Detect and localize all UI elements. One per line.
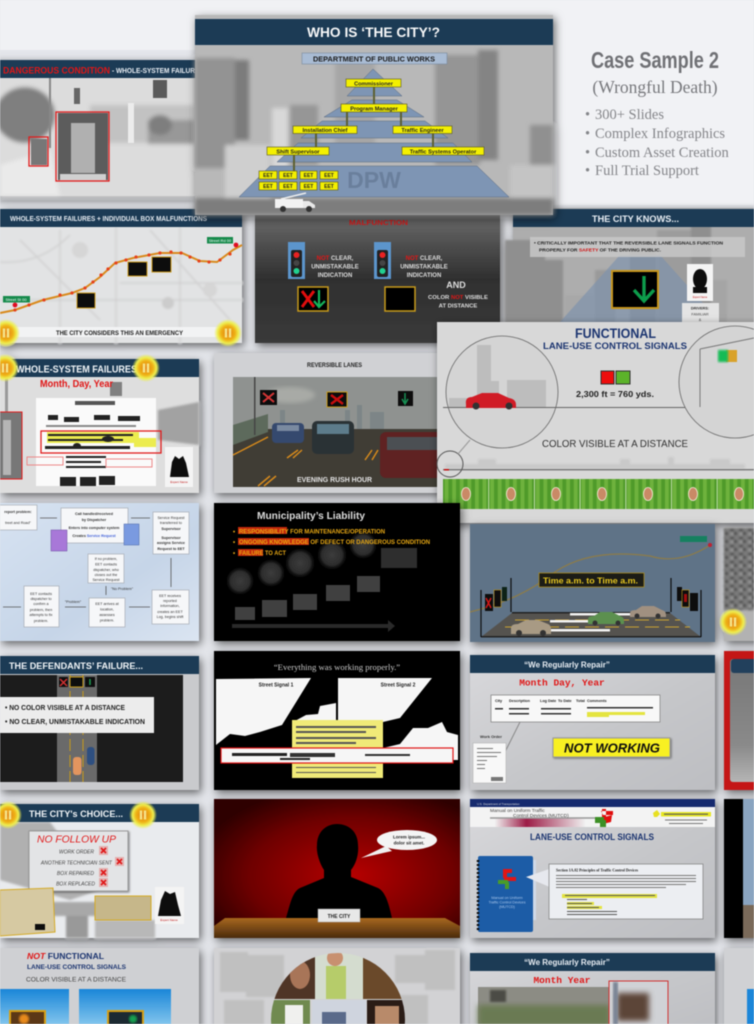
header bar: - WHOLE-SYSTEM FAILUR [112, 68, 195, 75]
yellow document [292, 720, 383, 778]
title: NOT FUNCTIONAL [27, 951, 105, 961]
dim arrow [232, 620, 395, 632]
desk [214, 918, 460, 938]
slide: the city silhouette [214, 799, 460, 938]
arrows [3, 518, 171, 607]
header [0, 359, 199, 377]
emergency caption: THE CITY CONSIDERS THIS AN EMERGENCY [56, 330, 184, 337]
road scene [233, 377, 443, 487]
left magnifier: car [443, 336, 754, 448]
quote: “Everything was working properly.” [274, 662, 400, 672]
flow text: EET receives [159, 594, 181, 598]
green arrow signal [612, 271, 658, 308]
flow text: confirm a [33, 602, 50, 606]
slide: dangerous condition [0, 60, 195, 196]
flow text: location, [100, 608, 114, 612]
bullets: • [233, 530, 235, 536]
not working label: NOT WORKING [564, 740, 660, 756]
EET grid: EET [263, 184, 273, 190]
bullets box [0, 697, 154, 733]
title: LANE-USE CONTROL SIGNALS [530, 832, 654, 843]
traffic signal right [374, 242, 391, 279]
signals left [485, 587, 507, 611]
role labels: Shift Supervisor [276, 150, 320, 156]
EET grid: EET [263, 173, 273, 179]
panel: functional lane-use control signals [437, 322, 754, 523]
no follow up box: BOX REPAIRED [57, 871, 94, 877]
signals right [677, 587, 698, 611]
sky photo right [79, 989, 171, 1024]
signal x and arrow [298, 287, 328, 311]
title: LANE-USE CONTROL SIGNALS [543, 341, 687, 352]
route line [470, 545, 710, 612]
slide: we regularly repair work order [470, 655, 715, 790]
work log table: Log Date [540, 699, 556, 703]
slide: MUTCD lane-use control signals [470, 799, 715, 938]
slide: aerial map [719, 527, 754, 641]
role boxes [267, 79, 484, 155]
title: Municipality’s Liability [257, 511, 365, 522]
work log table: Total [576, 699, 585, 703]
dark suv [312, 421, 354, 454]
flow text: dispatcher, who [93, 568, 119, 572]
small zoom circle [437, 440, 470, 477]
EET grid: EET [324, 184, 334, 190]
slide: not functional [0, 948, 199, 1024]
warning lights [0, 319, 20, 347]
caption: COLOR VISIBLE AT A DISTANCE [542, 439, 688, 450]
street signs [3, 237, 233, 302]
work log table: City [495, 699, 503, 703]
red zoom box [609, 981, 668, 1024]
feature list: Full Trial Support [595, 163, 699, 179]
header bar: WHOLE-SYSTEM FAILURES + INDIVIDUAL BOX MALFUNCTIONS [10, 216, 207, 223]
flow boxes [0, 505, 189, 627]
red and green signal squares [601, 371, 630, 384]
speech bubble [361, 830, 437, 858]
sketch background [0, 377, 199, 493]
leader line [501, 722, 520, 760]
street signs: Street St 00 [5, 297, 27, 302]
name plate: THE CITY [328, 914, 351, 920]
DPW watermark: DPW [347, 167, 401, 193]
blue car [272, 423, 304, 443]
text not clear right [400, 256, 448, 279]
warning lights [0, 354, 19, 382]
text not clear right: NOT CLEAR, [406, 256, 443, 262]
feature list [585, 107, 729, 179]
bullets: RESPONSIBILITY FOR MAINTENANCE/OPERATION [239, 530, 385, 536]
street signal labels: Street Signal 2 [381, 682, 416, 688]
slide: sky photo edge [724, 799, 754, 938]
expert card: Expert Name [160, 918, 178, 922]
slide: defendants' failure [0, 656, 199, 790]
lane arrows [550, 613, 630, 632]
expert card: Expert Name [170, 480, 188, 484]
role labels [276, 82, 477, 156]
street map background [0, 227, 242, 343]
drivers box: FAMILIAR [691, 312, 709, 316]
slide: reversible lanes [214, 353, 454, 493]
highlighted line [221, 748, 453, 763]
overhead signals [59, 677, 95, 687]
text not clear [311, 256, 359, 279]
role labels: Commissioner [354, 82, 394, 88]
flow text: reported [163, 599, 177, 603]
text not clear right: INDICATION [407, 273, 441, 279]
no follow up box: ANOTHER TECHNICIAN SENT [40, 860, 113, 866]
header bar [0, 60, 195, 78]
road [481, 578, 701, 638]
speech bubble: dolor sit amet. [394, 840, 424, 846]
bullets: • [233, 551, 235, 557]
header [470, 953, 715, 971]
case study heading: Case Sample 2 [591, 47, 719, 73]
flow text: Service Request [92, 578, 120, 582]
yellow-framed tan document [95, 896, 151, 920]
header: “We Regularly Repair” [524, 958, 610, 967]
dim documents [235, 548, 417, 620]
date: Month, Day, Year [40, 379, 113, 390]
role labels: Program Manager [350, 106, 399, 112]
bullets [233, 527, 430, 557]
red highlight boxes [0, 412, 161, 479]
flow text: assesses [99, 613, 115, 617]
header: WHO IS ‘THE CITY’? [307, 24, 440, 40]
text not clear: NOT CLEAR, [317, 256, 354, 262]
header bar [0, 209, 242, 227]
title: LANE-USE CONTROL SIGNALS [27, 964, 127, 971]
drivers box [682, 303, 719, 325]
header: WHOLE-SYSTEM FAILURES [16, 364, 137, 376]
flow text: Request to EET [157, 547, 185, 551]
date: Month Year [533, 975, 591, 986]
warning lights [0, 801, 22, 829]
overhead lane signals [260, 390, 413, 407]
flow text: problem. [34, 619, 48, 623]
slide: family photo circle [214, 948, 460, 1024]
flow text: treet and Road" [5, 521, 32, 525]
title: REVERSIBLE LANES [307, 363, 362, 369]
slide: who is the city [195, 15, 553, 215]
flow text: EET contacts [95, 562, 117, 566]
cars [73, 747, 94, 775]
skyline strip [445, 457, 745, 469]
flow text: dispatcher to [30, 597, 52, 601]
pyramid tiers [239, 69, 509, 197]
text not clear: INDICATION [318, 273, 352, 279]
warning light right [129, 801, 157, 829]
redacted photos [216, 678, 458, 760]
header: “We Regularly Repair” [524, 660, 610, 670]
title [543, 325, 687, 352]
flow text [4, 510, 185, 623]
bullet box [530, 237, 745, 257]
slide: whole-system failures document [0, 354, 199, 493]
and color not visible: AT DISTANCE [439, 304, 477, 310]
bullets: • [233, 540, 235, 546]
slide: everything was working properly [214, 651, 460, 790]
not working label [553, 738, 670, 757]
top band: U.S. Department of Transportation [477, 802, 520, 806]
route dots [13, 243, 238, 312]
manual book: Traffic Control Devices [488, 900, 526, 904]
slide: the city's choice [0, 801, 199, 938]
top band: Control Devices (MUTCD) [513, 813, 569, 819]
and color not visible: COLOR NOT VISIBLE [428, 295, 488, 301]
sky photo left [0, 989, 69, 1024]
work log table [491, 695, 660, 722]
flow text: closes out the [95, 573, 117, 577]
work order thumbnail: Work Order [480, 734, 502, 739]
expert card [155, 887, 184, 924]
flow text: assigns Service [157, 541, 185, 545]
flow text: report problem: [4, 510, 32, 514]
flow text: EET arrives at [95, 602, 119, 606]
witness card: Expert Name [693, 296, 708, 299]
dim timeline icons [226, 531, 377, 595]
manual book: (MUTCD) [499, 905, 515, 909]
work log table: Description [509, 699, 531, 703]
purple and blue folders [51, 524, 139, 551]
blurred skyline [195, 50, 553, 215]
header [0, 656, 199, 674]
silhouette [286, 824, 392, 918]
feature list: • [585, 107, 590, 123]
time label: Time a.m. to Time a.m. [543, 576, 638, 586]
and color not visible [428, 280, 488, 310]
bullet box: • CRITICALLY IMPORTANT THAT THE REVERSIBLE LANE SIGNALS FUNCTION [534, 240, 724, 246]
header bar: DANGEROUS CONDITION [3, 66, 110, 76]
slide: the city knows [505, 208, 754, 350]
role labels: Installation Chief [302, 128, 348, 134]
redacted report [36, 398, 156, 486]
drivers box: & [699, 318, 702, 322]
text not clear: UNMISTAKABLE [311, 264, 359, 270]
sketch photo of signal cabinet [0, 78, 195, 196]
tan car front [511, 620, 551, 636]
road diagram [0, 675, 183, 782]
header [513, 209, 754, 227]
flow text: Call handled/received [75, 512, 114, 516]
warning light [719, 608, 747, 636]
slide: red bordered photo [724, 651, 754, 790]
street signal labels [259, 682, 416, 688]
EET grid: EET [304, 184, 313, 190]
red heading: MALFUNCTION [349, 218, 408, 227]
header [0, 804, 199, 822]
flow text: "No Problem" [111, 587, 134, 591]
warning light right [132, 354, 160, 382]
feature list: 300+ Slides [595, 107, 664, 123]
slide: dark indication comparison [255, 215, 500, 343]
slide: edge sky photo [724, 948, 754, 1024]
header: THE DEFENDANTS’ FAILURE... [9, 661, 143, 672]
EET grid: EET [324, 173, 334, 179]
flow text: by Dispatcher [82, 518, 107, 522]
flow text: creates an EET [157, 610, 183, 614]
bullets box: • NO CLEAR, UNMISTAKABLE INDICATION [5, 719, 145, 726]
work log table: To Date [558, 699, 572, 703]
flow text: Supervisor [161, 527, 181, 531]
bullets: FAILURE TO ACT [239, 551, 286, 557]
flow text: EET contacts [30, 592, 52, 596]
name plate [318, 909, 360, 922]
distance: 2,300 ft = 760 yds. [576, 389, 654, 399]
feature list: Custom Asset Creation [595, 145, 729, 161]
flow text: If no problem, [95, 557, 117, 561]
feature list: Complex Infographics [595, 126, 725, 142]
red and green arrows [595, 809, 613, 827]
bullets: ONGOING KNOWLEDGE OF DEFECT OR DANGEROUS CONDITION [239, 540, 430, 546]
manual book: Manual on Uniform [491, 896, 523, 900]
top band [470, 799, 715, 827]
utility truck [275, 193, 315, 212]
flow text: Supervisor [161, 536, 181, 540]
callout [526, 864, 703, 919]
slide: time a.m. reversible road [470, 524, 715, 642]
right magnifier: signal [679, 326, 754, 438]
flow text: Log, begins shift [157, 615, 183, 619]
flow text: information, [160, 604, 180, 608]
caption: EVENING RUSH HOUR [297, 477, 372, 484]
red highlight boxes [29, 112, 109, 181]
no follow up box [29, 831, 128, 891]
role labels: Traffic Engineer [401, 128, 444, 134]
flow text: "Problem" [65, 600, 82, 604]
no follow up box: BOX REPLACED [56, 882, 95, 888]
feature list: • [585, 145, 590, 161]
text not clear right: UNMISTAKABLE [400, 264, 448, 270]
broken signal boxes on map [77, 257, 171, 308]
flow text: attempts to fix [30, 613, 53, 617]
flow text: transferred to [160, 521, 182, 525]
flow text: problem. [100, 618, 114, 622]
top band: Manual on Uniform Traffic [490, 808, 545, 814]
witness card [687, 264, 713, 301]
expert card [165, 447, 193, 487]
traffic signal left [288, 242, 305, 279]
header [195, 19, 553, 45]
speech bubble: Lorem ipsum... [393, 834, 425, 840]
manual book [478, 856, 536, 932]
header [470, 655, 715, 673]
sketch background [0, 822, 155, 938]
caption: COLOR VISIBLE AT A DISTANCE [26, 976, 126, 984]
flow text: Service Request [157, 516, 185, 520]
football fields [443, 479, 754, 509]
slide: we regularly repair photo [470, 953, 715, 1024]
drivers box: DRIVERS: [691, 306, 709, 310]
tan car rear [630, 606, 666, 618]
slide: whole-system failures map [0, 209, 242, 347]
connector lines [294, 87, 433, 171]
no follow up box: NO FOLLOW UP [37, 834, 116, 846]
feature list: • [585, 126, 590, 142]
yellow-framed tan map [0, 888, 55, 936]
flow text: Enters into computer system [69, 526, 120, 530]
bullet box: PROPERLY FOR SAFETY OF THE DRIVING PUBLIC. [539, 248, 661, 254]
work order thumbnail [473, 734, 506, 783]
EET grid [259, 171, 338, 190]
no follow up box: WORK ORDER [59, 850, 94, 856]
green car [588, 612, 624, 626]
street signs: Street Rd 00 [209, 238, 232, 243]
bullets box: • NO COLOR VISIBLE AT A DISTANCE [5, 705, 125, 712]
title [27, 951, 127, 971]
EET grid: EET [283, 173, 293, 179]
feature list: • [585, 163, 590, 179]
red car [380, 432, 442, 478]
street signal labels: Street Signal 1 [259, 682, 294, 688]
role labels: Traffic Systems Operator [410, 150, 477, 156]
and color not visible: AND [446, 280, 466, 290]
case study heading [591, 47, 719, 97]
title: FUNCTIONAL [575, 325, 656, 341]
slide: municipality's liability [214, 503, 460, 641]
callout: Section 1A.02 Principles of Traffic Control Devices [556, 868, 639, 872]
warning light right [214, 319, 242, 347]
route line [0, 245, 242, 313]
slide: flow chart [0, 503, 199, 641]
date: Month Day, Year [519, 678, 605, 688]
header: THE CITY's CHOICE... [29, 809, 123, 820]
flow text: Creates Service Request [72, 534, 116, 538]
subtitle: (Wrongful Death) [592, 77, 718, 97]
EET grid: EET [304, 173, 313, 179]
EET grid: EET [283, 184, 293, 190]
work log table: Comments [587, 699, 607, 703]
header: THE CITY KNOWS... [592, 214, 679, 224]
blank signal [385, 287, 415, 311]
blurred photo [478, 987, 610, 1024]
emergency caption [14, 327, 220, 337]
flow text: problem, then [30, 608, 52, 612]
note [653, 810, 711, 824]
department label: DEPARTMENT OF PUBLIC WORKS [313, 54, 435, 64]
circular collage [270, 950, 408, 1024]
time label [539, 573, 644, 587]
